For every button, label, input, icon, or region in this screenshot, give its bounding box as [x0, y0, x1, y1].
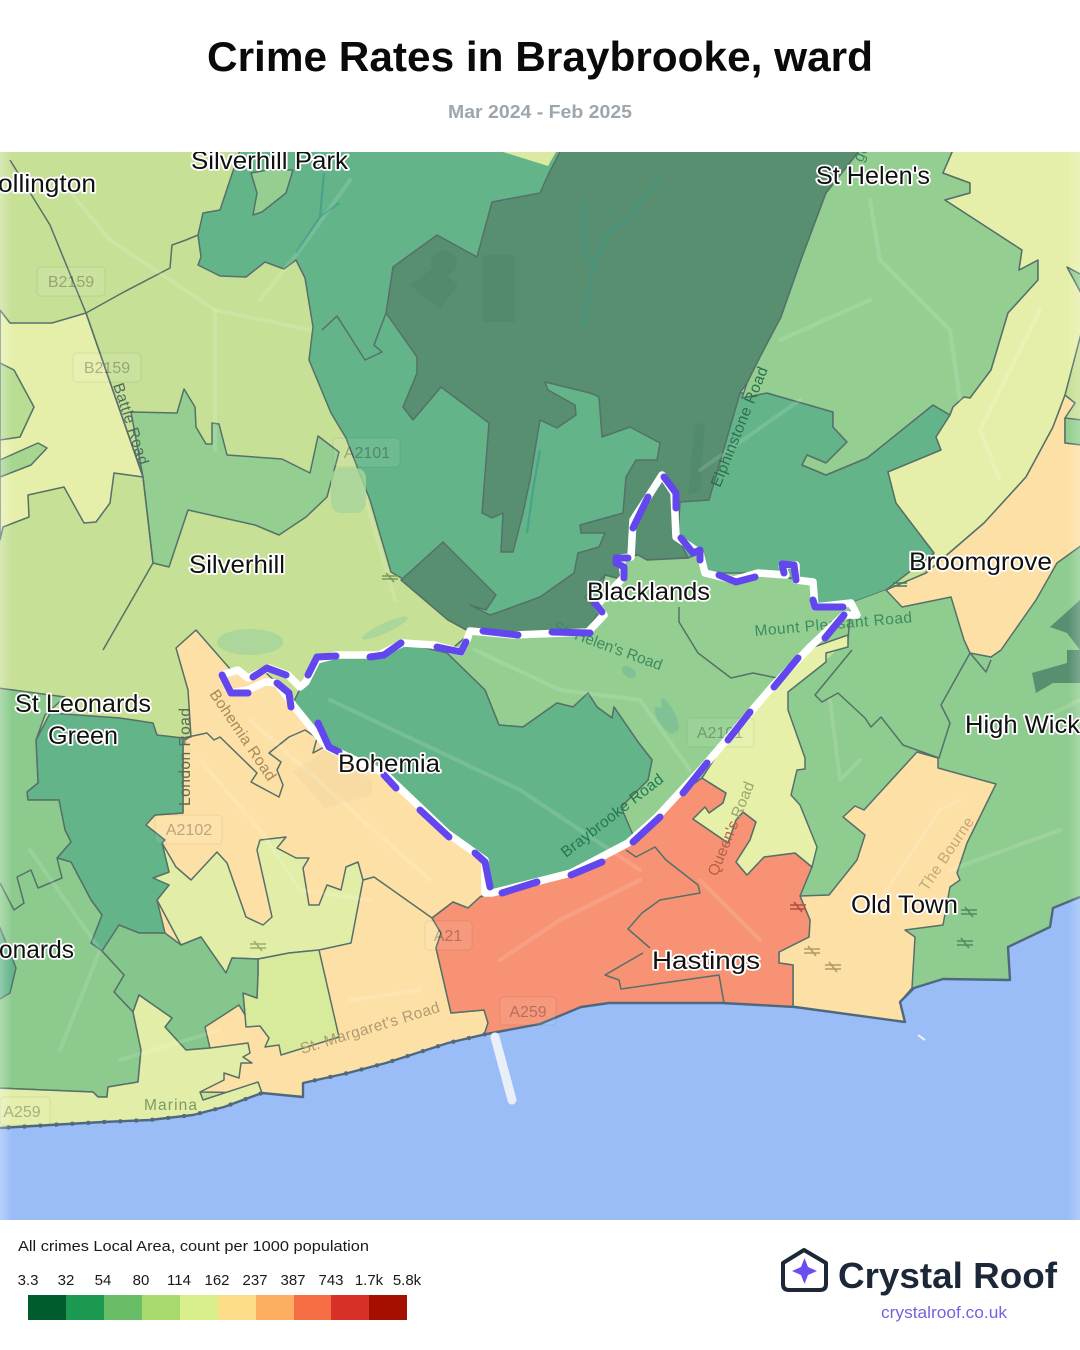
logo: Crystal Roof — [783, 1250, 1058, 1322]
ward boundary: purple dashes — [222, 477, 844, 893]
place name labels: Silverhill — [189, 551, 285, 579]
boundary between orange wards — [363, 877, 432, 918]
region: west sliver, light green — [0, 443, 47, 477]
region: dark forest, lowest crime — [386, 150, 860, 633]
coastline serrations — [303, 1034, 486, 1083]
boundary, Hastings lower — [605, 953, 724, 1003]
legend — [18, 1238, 422, 1320]
coastline serrations west — [0, 1093, 262, 1128]
land base: Silverhill and Hollington — [0, 152, 1080, 1128]
road name labels: London Road — [177, 708, 194, 806]
road shield labels: A2101 — [344, 445, 390, 462]
region: top corner, yellow — [503, 152, 556, 166]
road shield labels: A2102 — [166, 822, 212, 839]
boundary in west St Leonards — [0, 858, 62, 910]
legend scale values: 387 — [280, 1272, 306, 1289]
place name labels: High Wick — [965, 711, 1080, 739]
region: Queen's Road area, pale yellow — [693, 635, 848, 875]
Bohemia Road enclosed boundary — [183, 730, 324, 797]
region: Bohemia and Braybrooke, teal green — [293, 643, 652, 893]
road shield labels: A259 — [509, 1004, 547, 1021]
place name labels: Silverhill Park — [191, 147, 349, 175]
choropleth map panel — [0, 142, 1080, 1220]
legend scale values: 80 — [133, 1272, 149, 1289]
road name labels: ge — [850, 142, 873, 165]
legend colour bar — [28, 1295, 407, 1320]
place name labels: Hastings — [652, 947, 760, 975]
place name labels: St Helen's — [816, 162, 930, 190]
region: St Leonards central, pale yellow — [153, 837, 363, 973]
rail station icons — [250, 573, 977, 972]
boundary inside Blacklands — [679, 607, 777, 678]
legend scale values: 743 — [318, 1272, 344, 1289]
region: west St Leonards, green — [0, 688, 141, 1097]
road name labels: Marina — [144, 1097, 197, 1114]
region: dark patch near High Wickham — [1032, 650, 1080, 693]
region: Hastings centre, red-orange — [432, 778, 812, 1035]
road shield labels: A21 — [434, 928, 462, 945]
place name labels: Green — [48, 722, 118, 750]
line along Battle Road — [10, 160, 153, 563]
region: dark shard near High Wickham — [1050, 600, 1080, 650]
boundary lines at Silverhill Park — [322, 313, 386, 360]
place name labels: ollington — [0, 170, 96, 198]
road name labels: The Bourne — [916, 814, 978, 894]
region: north-east, pale yellow — [888, 150, 1080, 573]
region: Gensing, green — [102, 925, 258, 1050]
sea — [0, 898, 1080, 1220]
region: Bohemia Road area, orange — [146, 630, 488, 1097]
forest detail: tint patches — [410, 250, 705, 495]
region: Warrior Square, light yellow-green — [243, 950, 339, 1055]
map edge fade right — [1068, 152, 1080, 1220]
place name labels: Bohemia — [338, 750, 440, 778]
road shield labels: A2101 — [697, 725, 743, 742]
place name labels: onards — [0, 936, 74, 964]
place name labels: Old Town — [851, 891, 958, 919]
region: Silverhill Park and Alexandra Park area, teal green — [198, 150, 950, 632]
legend title: All crimes Local Area, count per 1000 population — [18, 1238, 369, 1255]
road name labels: Battle Road — [109, 381, 152, 467]
road shield labels: A259 — [3, 1104, 41, 1121]
legend scale values: 114 — [167, 1272, 191, 1289]
region: east edge sliver, green — [1067, 267, 1080, 295]
Alexandra Park ponds — [622, 666, 679, 734]
region: Broomgrove, orange — [886, 395, 1080, 657]
region: small pocket in teal area — [251, 170, 293, 215]
road name labels: Elphinstone Road — [708, 364, 772, 489]
road name labels: Queen's Road — [705, 779, 758, 878]
region: west pocket, light green — [0, 363, 34, 440]
region: Marina, pale yellow — [0, 995, 262, 1128]
line near Silverhill — [103, 563, 153, 650]
region: west edge teal shard — [0, 923, 16, 1000]
pier fragment — [918, 1035, 925, 1040]
place name labels: St Leonards — [15, 690, 151, 718]
streams — [296, 173, 659, 533]
road name labels: Mount Pleasant Road — [754, 609, 913, 640]
region: Old Town, orange — [779, 752, 996, 1022]
legend scale values: 1.7k — [355, 1272, 384, 1289]
place name labels — [0, 147, 1080, 975]
road name labels: St. Margaret's Road — [298, 999, 442, 1058]
road name labels — [109, 142, 978, 1114]
region: central Blacklands green — [447, 553, 851, 842]
legend scale values: 237 — [242, 1272, 268, 1289]
legend scale values: 32 — [58, 1272, 74, 1289]
region: Hollington south, pale yellow — [0, 310, 143, 540]
icon: house with star — [783, 1250, 826, 1290]
boundary stub east — [970, 653, 991, 672]
region: St Helen's, green — [742, 150, 1038, 475]
road name labels: Braybrooke Road — [558, 771, 667, 861]
website: crystalroof.co.uk — [881, 1304, 1008, 1322]
region: east edge pocket, green — [1065, 418, 1080, 445]
road name labels: Bohemia Road — [206, 687, 279, 784]
region: St Leonards Green, teal — [27, 713, 183, 951]
title: Crime Rates in Braybrooke, ward — [207, 33, 873, 80]
place name labels: Broomgrove — [909, 548, 1052, 576]
region: east and south-east green — [788, 520, 1080, 1002]
place name labels: Blacklands — [587, 578, 710, 606]
ward boundary: white underlay — [222, 475, 857, 893]
legend scale values: 3.3 — [18, 1272, 38, 1289]
legend scale values: 5.8k — [393, 1272, 422, 1289]
coastline — [0, 897, 1080, 1128]
map edge fade — [0, 152, 12, 1220]
boundary lines Hollington — [86, 235, 198, 313]
legend scale values: 54 — [95, 1272, 111, 1289]
boundaries in Hastings — [626, 847, 700, 948]
wordmark: Crystal Roof — [838, 1255, 1058, 1296]
legend scale values: 162 — [204, 1272, 230, 1289]
subtitle: date range: Mar 2024 - Feb 2025 — [448, 101, 632, 122]
road name labels: St. Helen's Road — [551, 619, 665, 674]
legend scale values — [18, 1272, 422, 1289]
region: Silverhill north, green — [131, 389, 339, 567]
built-up patch — [293, 750, 372, 808]
boundaries east — [815, 650, 970, 758]
road shield labels: B2159 — [48, 274, 94, 291]
road shield labels — [0, 267, 754, 1125]
faint road network — [30, 180, 1080, 1060]
pier — [495, 1037, 512, 1100]
ponds Silverhill — [217, 468, 410, 655]
road shield labels: B2159 — [84, 360, 130, 377]
